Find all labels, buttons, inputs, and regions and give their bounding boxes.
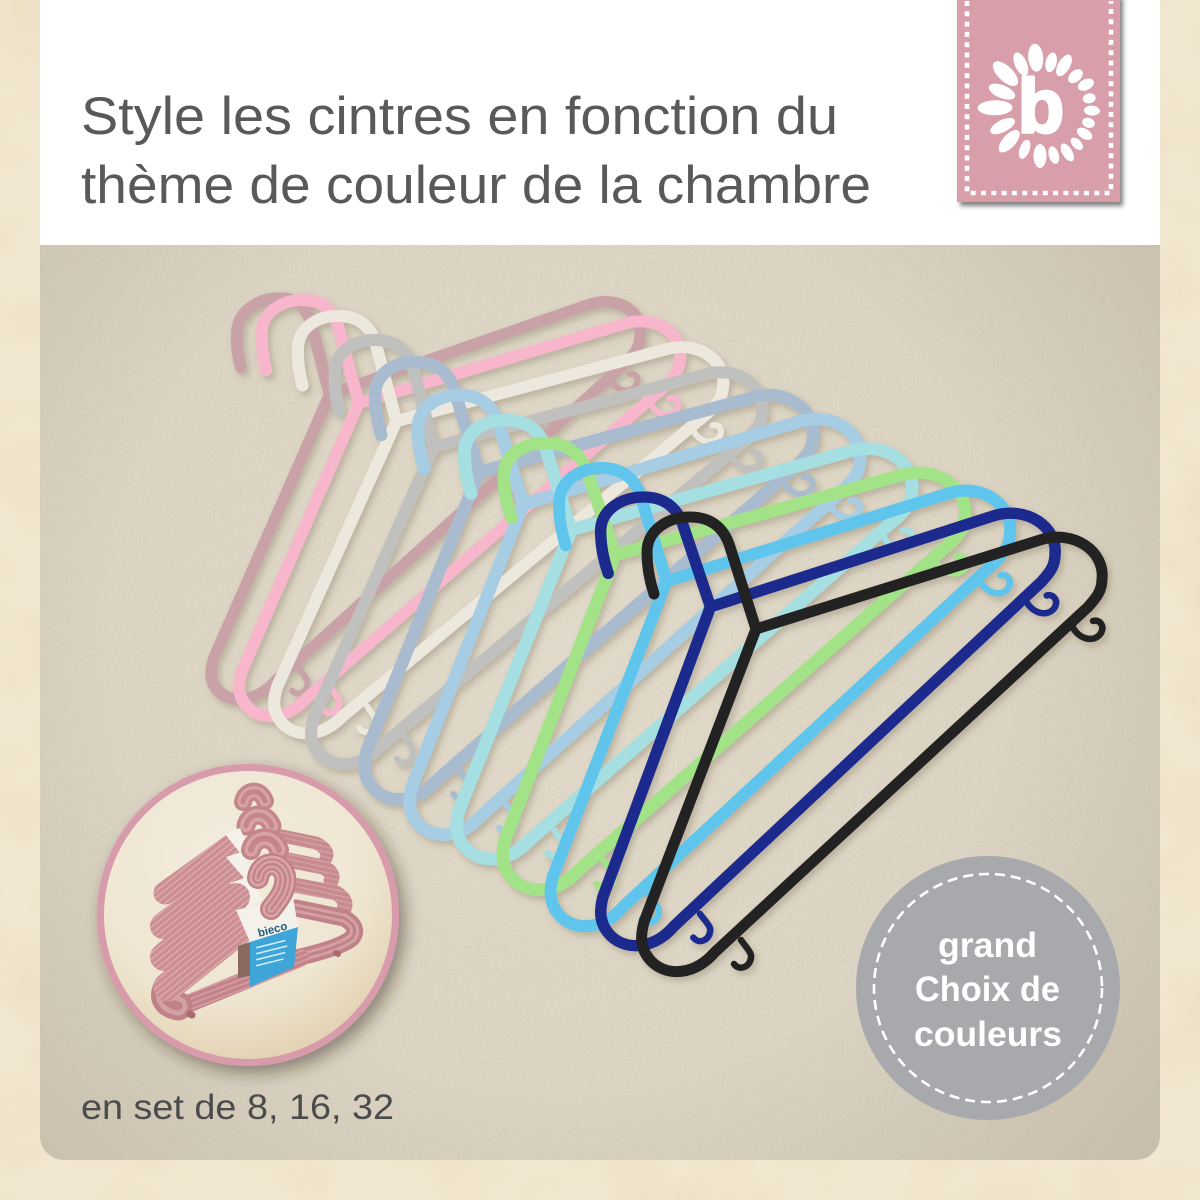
title: Style les cintres en fonction du [81,87,838,146]
hanger: grey blue [364,360,814,815]
inset circle: set of pink hangers [97,764,399,1066]
front hook [258,864,285,909]
set sizes caption: en set de 8, 16, 32 [81,1088,394,1127]
product sleeve: bieco [257,921,289,940]
second hanger [163,815,332,926]
badge text: grand [938,926,1037,965]
photo panel [40,245,1160,1160]
badge text: couleurs [914,1015,1062,1054]
hanger: aqua [456,419,913,869]
hanger: green [498,442,970,901]
hanger: cyan [550,468,1011,929]
hanger: navy [595,493,1061,946]
hanger: black [642,517,1102,972]
badge text: Choix de [915,970,1060,1009]
header band [40,0,1160,245]
small sleeve tags [225,828,262,908]
title [81,87,871,215]
title: thème de couleur de la chambre [81,156,871,215]
front hanger [166,908,355,1015]
badge text [914,926,1062,1054]
stacked hangers [163,792,355,1015]
logo tag [957,0,1120,202]
hanger: grey [310,338,765,780]
third hanger [164,838,345,957]
colour choice badge [856,856,1120,1120]
back hanger [165,792,327,893]
hanger: light blue [409,394,861,840]
hanger: mauve [209,282,644,701]
product sleeve [236,897,298,987]
hangers row [209,282,1102,972]
icon: flower logo: b [1018,64,1064,149]
icon: flower logo [977,43,1100,168]
hanger: pink [238,300,683,720]
hanger: white [273,314,726,748]
